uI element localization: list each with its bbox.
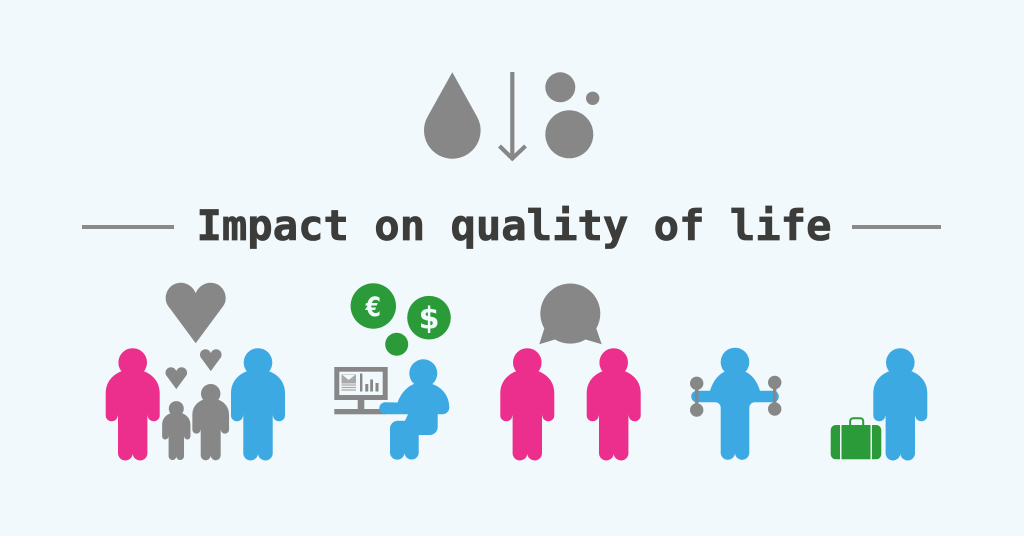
arrow: pointing down — [500, 72, 526, 158]
panel: finances and work — [334, 283, 451, 460]
panel: conversation — [500, 284, 641, 460]
icon: small heart right — [200, 349, 222, 371]
panel: family — [106, 283, 285, 460]
person: older child — [192, 384, 229, 460]
icon: thought dot — [385, 333, 408, 356]
icon: bubbles — [545, 72, 599, 158]
icon: water drop — [424, 72, 481, 159]
icon: left dumbbell — [690, 377, 703, 417]
person: pink right — [587, 348, 641, 460]
icon: suitcase — [831, 418, 881, 459]
person: pink adult — [106, 348, 160, 460]
heading with side rules — [82, 201, 941, 250]
person: younger child — [162, 401, 190, 460]
panel: exercise — [690, 348, 781, 460]
icon: dollar coin: $ — [419, 302, 439, 336]
icon: speech bubble — [539, 284, 602, 344]
icon: small heart left — [166, 367, 187, 389]
person: seated at desk — [379, 359, 449, 460]
icon: right dumbbell — [768, 376, 781, 416]
icon: euro coin: € — [365, 291, 381, 323]
person: blue adult — [231, 348, 285, 460]
icon: computer monitor — [334, 367, 388, 414]
icon: dollar coin — [407, 296, 451, 340]
icon: large heart — [166, 283, 226, 343]
panel: travel — [831, 348, 927, 460]
person: pink left — [500, 348, 554, 460]
title: Impact on quality of life — [196, 201, 831, 250]
person: lifting weights — [691, 348, 779, 460]
icon: euro coin — [351, 283, 396, 329]
person: blue standing — [873, 348, 927, 460]
